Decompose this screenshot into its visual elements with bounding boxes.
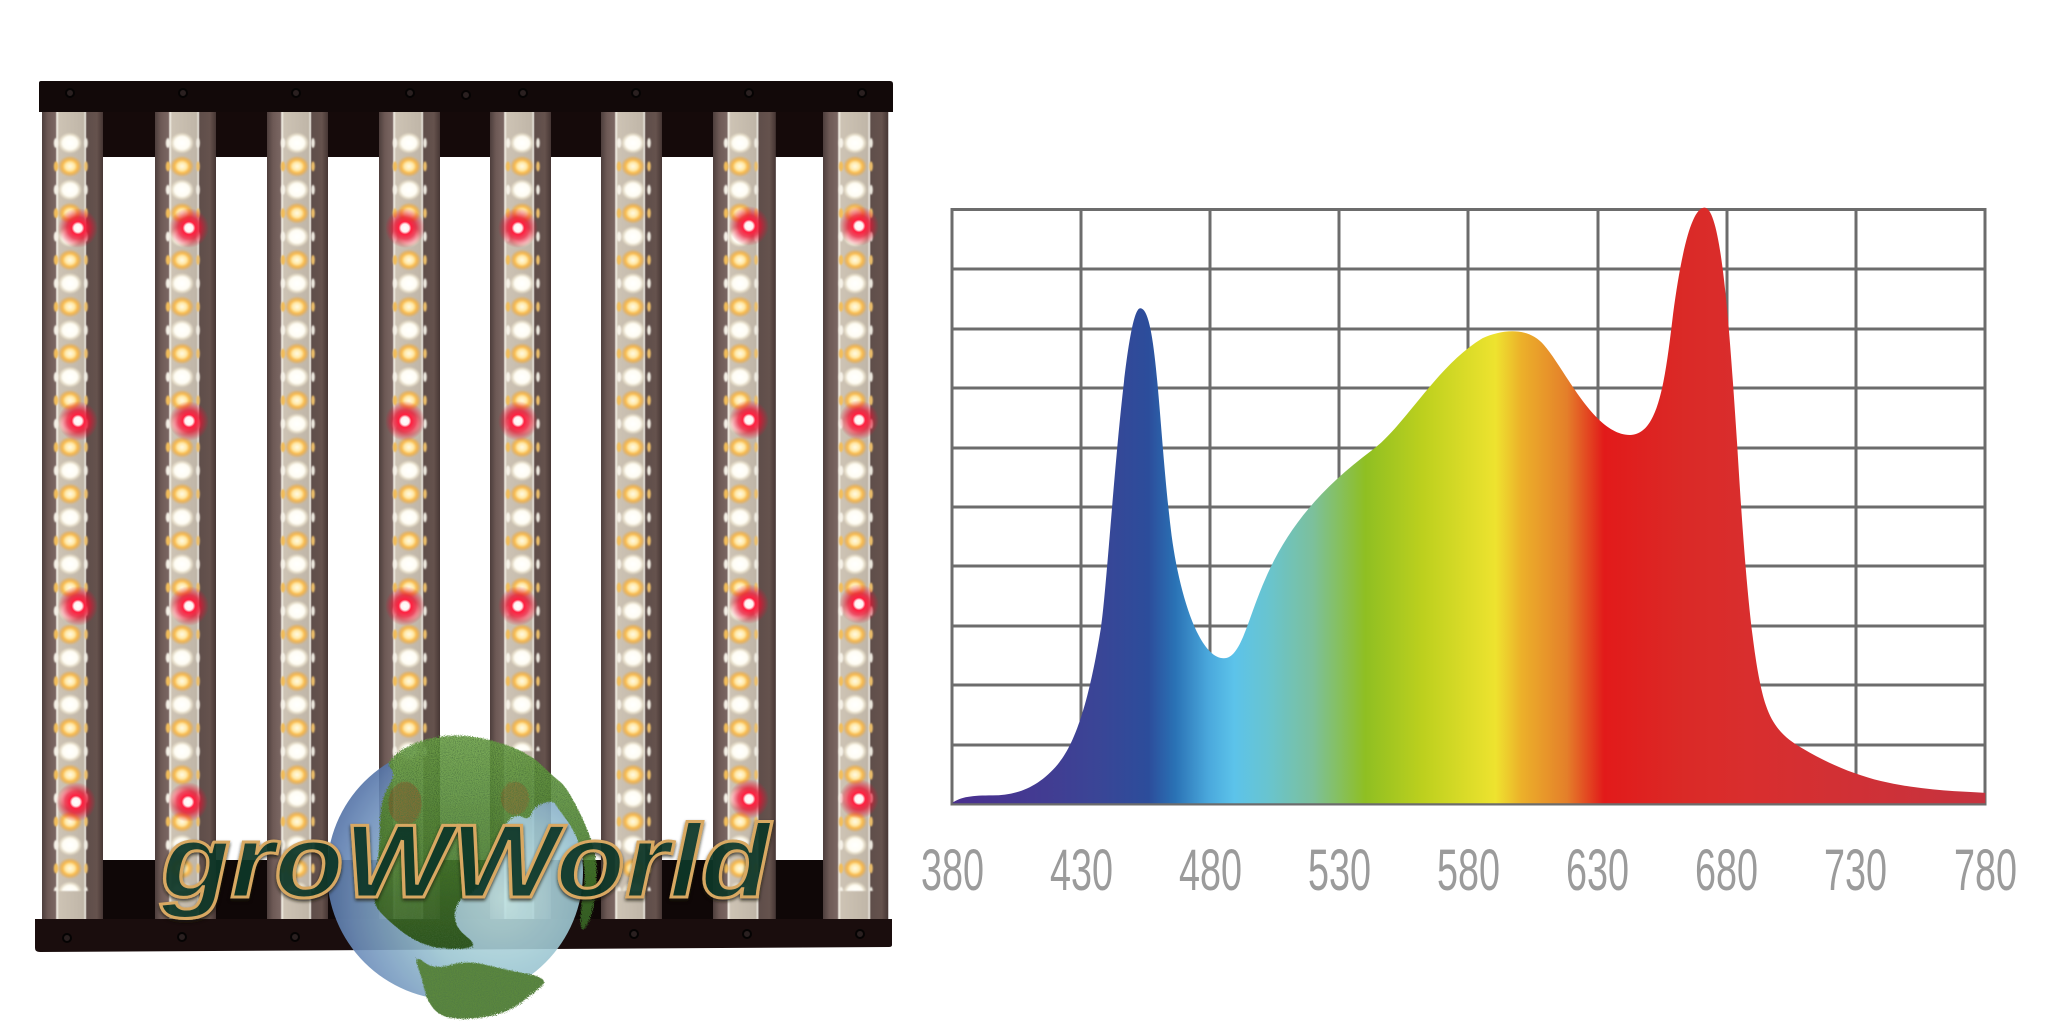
panel: LED grow light fixture: [35, 81, 893, 952]
brown highland west: [388, 782, 422, 825]
globe ocean: [327, 744, 583, 1000]
LED bar 1: [42, 112, 103, 919]
x-axis wavelength labels: 580: [1437, 838, 1500, 903]
x-axis wavelength labels: 630: [1566, 838, 1629, 903]
LED bar 3: [267, 112, 328, 919]
top rail: [39, 81, 893, 112]
LED bar 7: [712, 112, 776, 919]
LED bar 4: [379, 112, 440, 919]
x-axis wavelength labels: 780: [1954, 838, 2017, 903]
LED bar 2: [154, 112, 216, 919]
chart grid: [952, 209, 1985, 804]
panel: spectrum chart: [921, 208, 2017, 903]
bottom rail: [35, 919, 892, 952]
x-axis wavelength labels: 380: [921, 838, 984, 903]
x-axis wavelength labels: 730: [1824, 838, 1887, 903]
LED bar 5: [490, 112, 551, 919]
South America: [417, 959, 544, 1019]
upper back bar: [42, 105, 888, 157]
LED bar 8: [823, 112, 888, 919]
brown highland east: [501, 782, 529, 815]
x-axis wavelength labels: 480: [1179, 838, 1242, 903]
x-axis wavelength labels: 430: [1050, 838, 1113, 903]
North America: [374, 736, 597, 949]
x-axis wavelength labels: 680: [1695, 838, 1758, 903]
continents: [374, 736, 597, 1019]
LED bar 6: [601, 112, 662, 919]
lower back bar: [42, 860, 888, 922]
spectrum curve: [952, 208, 1985, 803]
logo wordmark: groWWorld: [160, 804, 773, 920]
x-axis wavelength labels: 530: [1308, 838, 1371, 903]
x-axis wavelength labels: [921, 838, 2017, 903]
icon: grassy globe: [327, 736, 597, 1019]
